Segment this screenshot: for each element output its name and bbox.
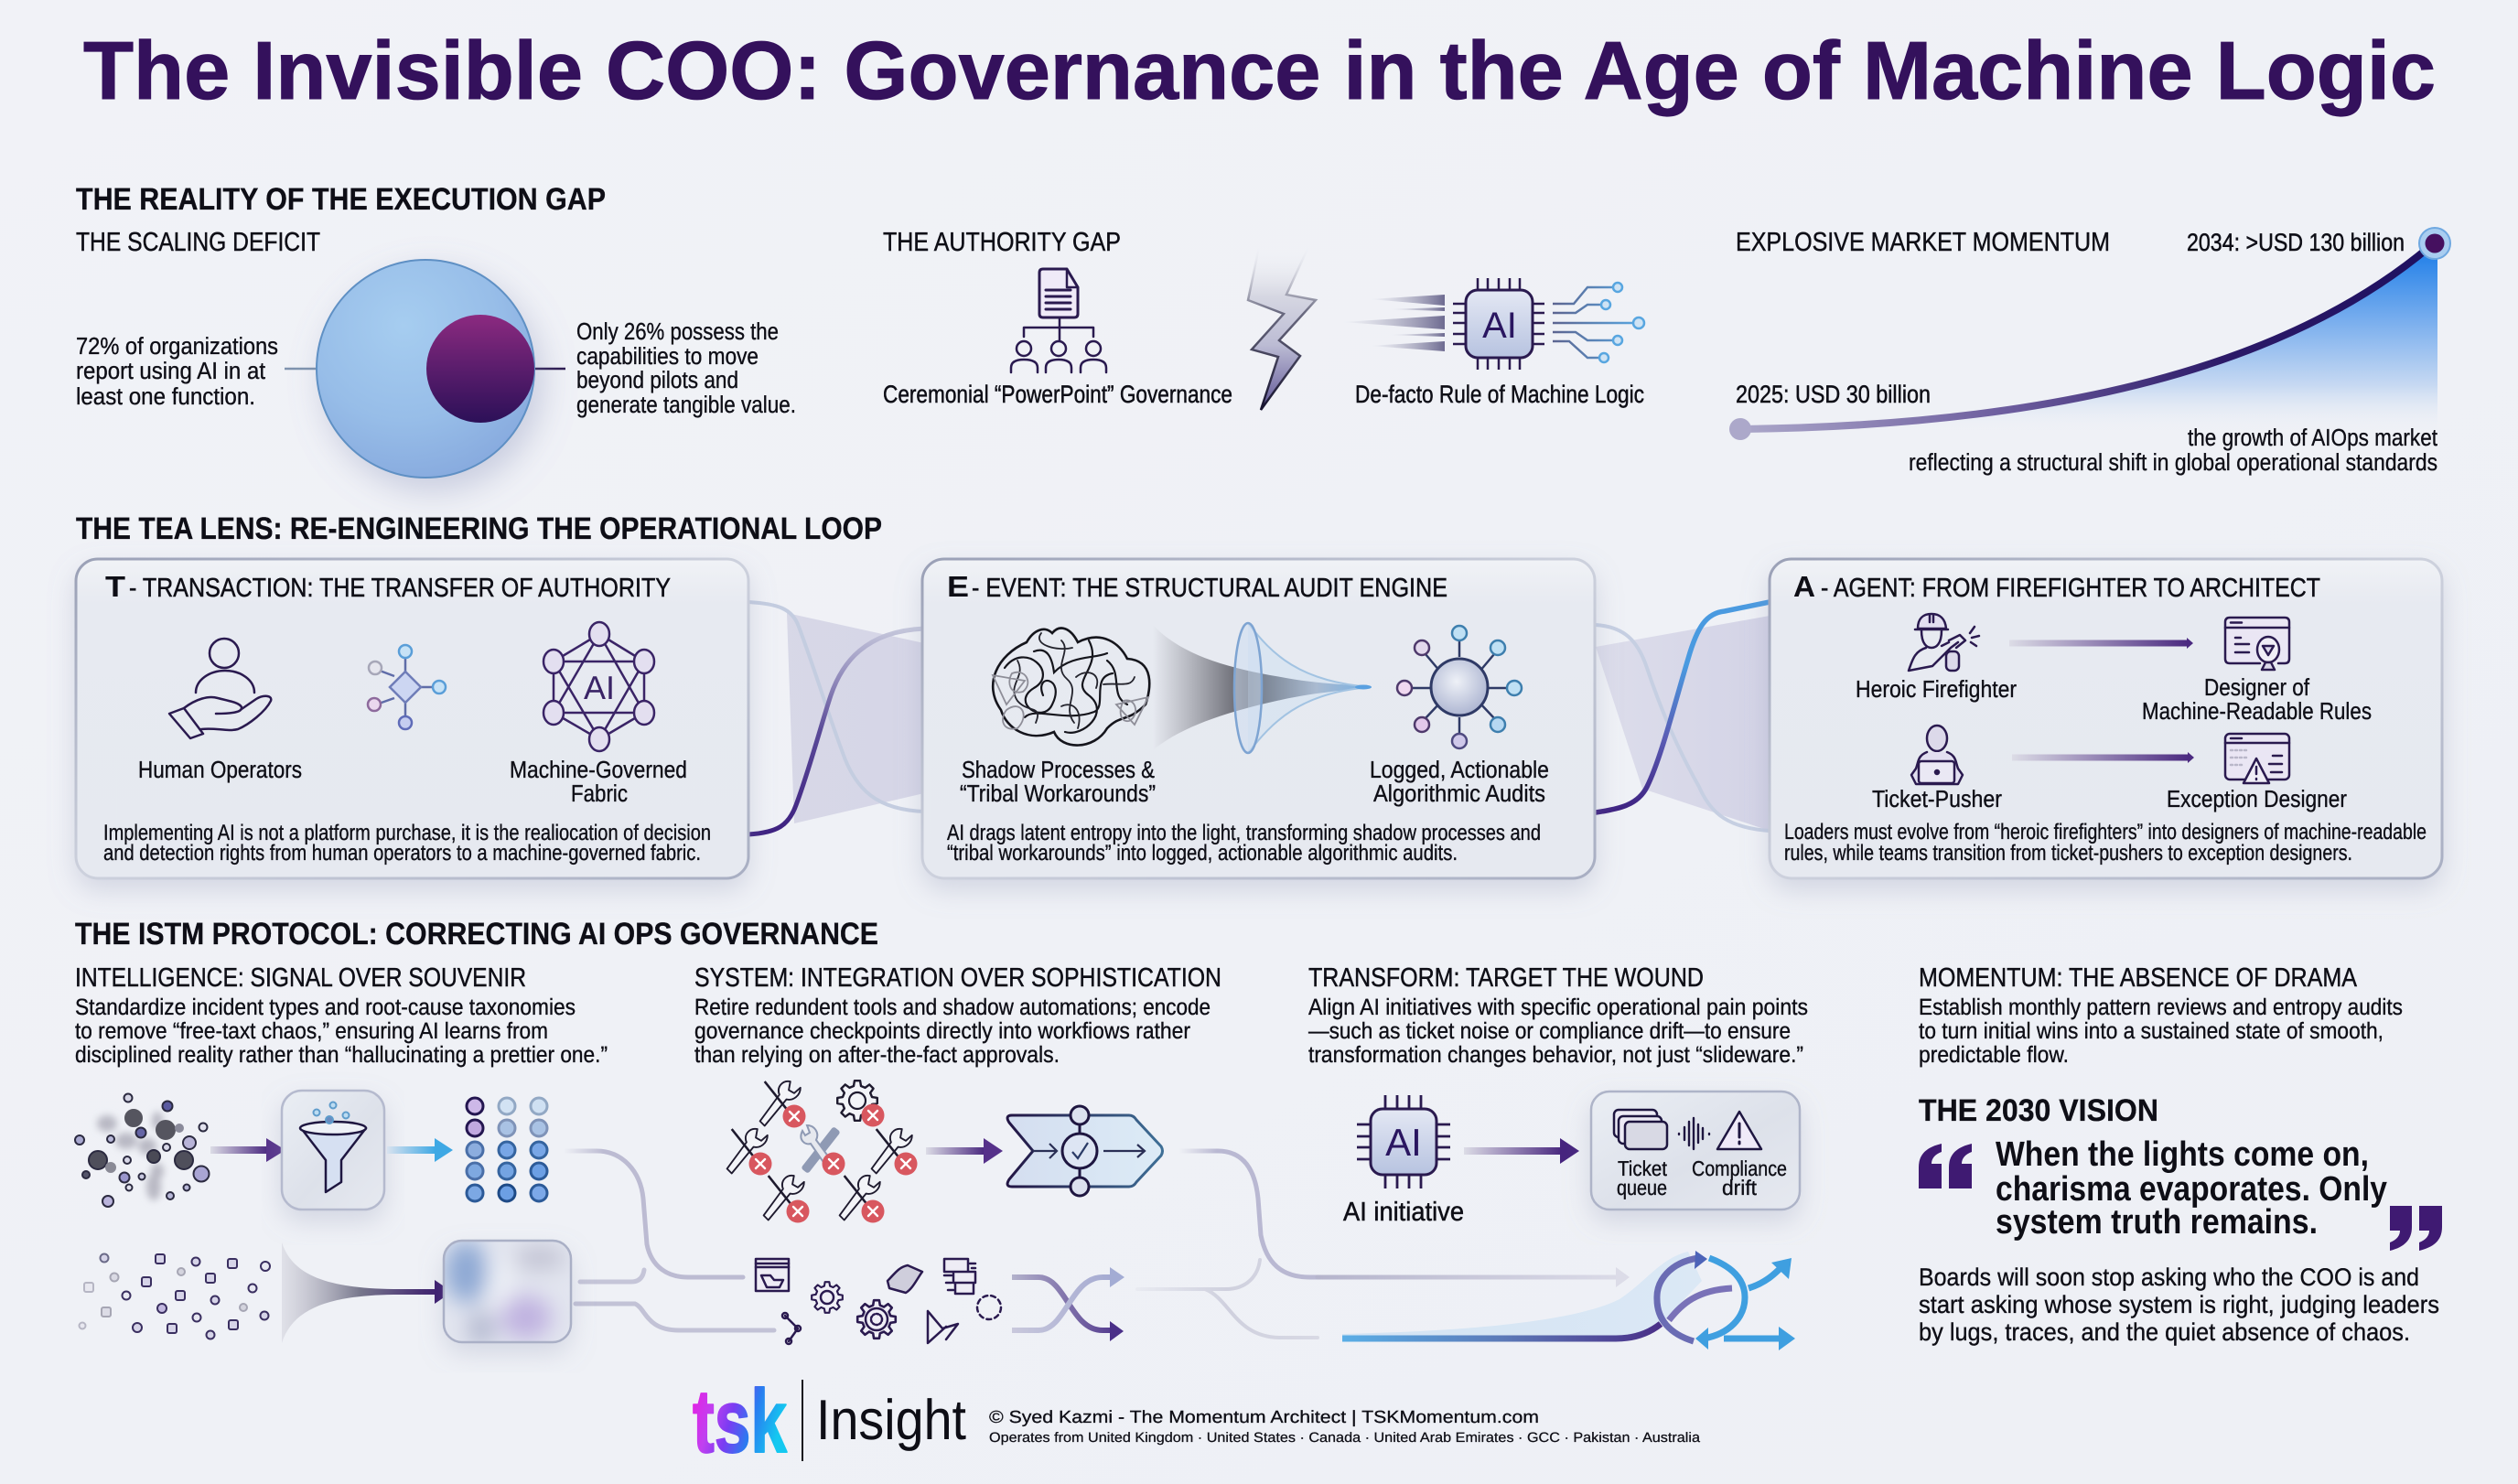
blurred hallucination card — [444, 1241, 571, 1345]
body text: event: “tribal workarounds” into logged, actionable algorithmic audits. — [947, 841, 1458, 866]
icon: document with org chart — [1011, 269, 1106, 372]
footer — [693, 1371, 1701, 1471]
connector: T to E ribbon — [748, 602, 924, 834]
quote text: When the lights come on, — [1996, 1135, 2369, 1174]
title: The Invisible COO: Governance in the Age of Machine Logic — [83, 26, 2436, 117]
illustration: transform — [1342, 1091, 1800, 1350]
body text: event: AI drags latent entropy into the light, transforming shadow processes and — [947, 821, 1541, 845]
label: designer of machine-readable rules: Designer of — [2204, 673, 2310, 701]
body: system: than relying on after-the-fact approvals. — [694, 1042, 1060, 1068]
logo: tsk Insight — [693, 1371, 966, 1471]
heading: the tea lens: THE TEA LENS: RE-ENGINEERING THE OPERATIONAL LOOP — [76, 511, 882, 546]
body text: event — [947, 821, 1541, 866]
logo: tsk Insight: tsk — [693, 1371, 787, 1471]
quote text: charisma evaporates. Only — [1996, 1170, 2387, 1209]
connector: E to A ribbon — [1596, 602, 1770, 831]
icon: AI initiative chip — [1357, 1095, 1450, 1188]
label: logged audits: Logged, Actionable — [1370, 756, 1549, 783]
body: system — [694, 995, 1211, 1068]
scattered noise particles — [75, 1094, 209, 1207]
column: momentum text — [1919, 963, 2403, 1068]
panel: the 2030 vision — [1919, 1093, 2442, 1346]
card title: transaction: T — [105, 570, 126, 603]
text: only 26 percent: Only 26% possess the — [576, 317, 779, 345]
footer credit: © Syed Kazmi - The Momentum Architect | TSKMomentum.com — [989, 1408, 1539, 1427]
body text: agent — [1784, 820, 2427, 866]
chart: growth curve — [1729, 228, 2450, 440]
card title: agent: - AGENT: FROM FIREFIGHTER TO ARCHITECT — [1821, 574, 2320, 603]
icon: audit hub — [1397, 626, 1522, 748]
caption: growth of AIOps market: reflecting a structural shift in global operational standards — [1909, 448, 2437, 476]
label: heroic firefighter: Heroic Firefighter — [1856, 675, 2017, 703]
panel: the authority gap — [883, 228, 1644, 410]
text: 72 percent of organizations: report using AI in at — [76, 357, 266, 384]
icon: transfer network — [368, 645, 446, 729]
card title: transaction: - TRANSACTION: THE TRANSFER OF AUTHORITY — [129, 574, 671, 603]
body text: agent: rules, while teams transition from ticket-pushers to exception designers. — [1784, 841, 2352, 866]
subheading: authority gap: THE AUTHORITY GAP — [883, 228, 1121, 257]
icon: closing quote marks — [2390, 1206, 2442, 1251]
body: system: governance checkpoints directly into workfiows rather — [694, 1018, 1190, 1044]
retired tools with red x badges — [727, 1081, 917, 1222]
label: 2034 value: 2034: >USD 130 billion — [2187, 229, 2405, 256]
label: compliance drift — [1692, 1156, 1787, 1199]
label: ceremonial governance: Ceremonial “PowerPoint” Governance — [883, 381, 1232, 408]
body: transform — [1308, 995, 1808, 1068]
icon: firefighter — [1909, 614, 1979, 671]
panel: E event — [922, 559, 1595, 878]
column: transform text — [1308, 963, 1808, 1068]
logo: tsk Insight: Insight — [816, 1389, 966, 1452]
body: transform: transformation changes behavior, not just “slideware.” — [1308, 1042, 1803, 1068]
icon: rule window — [2225, 618, 2289, 670]
panel: A agent — [1770, 559, 2442, 878]
label: ticket queue: queue — [1617, 1176, 1667, 1199]
column: intelligence text — [75, 963, 608, 1068]
label: AI initiative: AI initiative — [1343, 1198, 1464, 1227]
chart: nested circles — [285, 260, 565, 478]
label: shadow processes — [960, 756, 1156, 807]
icon: AI initiative chip: AI — [1385, 1121, 1422, 1164]
body: momentum: Establish monthly pattern reviews and entropy audits — [1919, 995, 2403, 1020]
label: ticket-pusher: Ticket-Pusher — [1872, 785, 2002, 812]
body: transform: Align AI initiatives with specific operational pain points — [1308, 995, 1808, 1020]
label: logged audits — [1370, 756, 1549, 807]
illustration: system tools to checkpoint — [727, 1081, 1162, 1344]
icon: ticket pusher — [1911, 726, 1963, 784]
subheading: system: SYSTEM: INTEGRATION OVER SOPHISTICATION — [694, 963, 1221, 993]
icon: exception window — [2225, 734, 2289, 783]
body: transform: —such as ticket noise or compliance drift—to ensure — [1308, 1018, 1791, 1044]
panel: the scaling deficit — [76, 228, 796, 478]
icon: workflow chevron with checkpoint — [1007, 1106, 1162, 1196]
icon: warning triangle — [1717, 1112, 1761, 1149]
quote text — [1996, 1135, 2387, 1242]
subheading: transform: TRANSFORM: TARGET THE WOUND — [1308, 963, 1704, 993]
subheading: momentum: MOMENTUM: THE ABSENCE OF DRAMA — [1919, 963, 2358, 993]
quote text: system truth remains. — [1996, 1203, 2318, 1242]
panel: explosive market momentum — [1729, 228, 2450, 476]
subheading: scaling deficit: THE SCALING DEFICIT — [76, 228, 320, 257]
icon: opening quote marks — [1919, 1144, 1972, 1188]
body text: transaction: Implementing AI is not a platform purchase, it is the realiocation of decision — [103, 821, 711, 845]
ordered dot grid — [467, 1098, 547, 1201]
label: designer of machine-readable rules — [2142, 673, 2372, 725]
body: intelligence: disciplined reality rather than “hallucinating a prettier one.” — [75, 1042, 608, 1068]
body: boards: start asking whose system is right, judging leaders — [1919, 1291, 2439, 1318]
body: boards — [1919, 1264, 2439, 1346]
icon: momentum ramp and loop — [1342, 1251, 1795, 1350]
body text: transaction — [103, 821, 711, 866]
body: system: Retire redundent tools and shadow automations; encode — [694, 995, 1211, 1020]
card title: event: E — [947, 570, 969, 603]
panel: T transaction — [76, 559, 748, 878]
caption: growth of AIOps market — [1909, 424, 2438, 476]
text: 72 percent of organizations: 72% of organizations — [76, 332, 278, 360]
icon: human operators hand — [169, 639, 271, 738]
arrow: AI to pain points — [1464, 1138, 1579, 1164]
arrow: into filter — [210, 1138, 285, 1162]
body: intelligence: Standardize incident types and root-cause taxonomies — [75, 995, 576, 1020]
body text: transaction: and detection rights from human operators to a machine-governed fabric. — [103, 841, 701, 866]
card title: event: - EVENT: THE STRUCTURAL AUDIT ENGINE — [972, 574, 1447, 603]
text: 72 percent of organizations: least one function. — [76, 382, 255, 410]
body: momentum: predictable flow. — [1919, 1042, 2069, 1068]
label: compliance drift: drift — [1722, 1176, 1758, 1199]
label: exception designer: Exception Designer — [2167, 785, 2347, 812]
arrow: to workflow — [926, 1138, 1003, 1164]
icon: noise waveform — [1679, 1118, 1709, 1149]
body: intelligence: to remove “free-taxt chaos,” ensuring AI learns from — [75, 1018, 548, 1044]
heading: 2030 vision: THE 2030 VISION — [1919, 1093, 2158, 1128]
icon: funnel in glass card — [282, 1091, 384, 1210]
icon: AI chip with speed streaks and circuits: AI — [1482, 306, 1517, 346]
footer locations: Operates from United Kingdom · United States · Canada · United Arab Emirates · GCC · Pakistan · Australia — [989, 1430, 1701, 1446]
label: shadow processes: “Tribal Workarounds” — [960, 780, 1156, 807]
label: 2025 value: 2025: USD 30 billion — [1736, 381, 1931, 408]
label: logged audits: Algorithmic Audits — [1373, 780, 1545, 807]
icon: funnel lens and beam — [1153, 623, 1372, 753]
text: 72 percent of organizations — [76, 332, 278, 410]
icon: machine governed fabric: AI — [584, 669, 615, 706]
text: only 26 percent: capabilities to move — [576, 342, 759, 370]
label: ticket queue — [1617, 1156, 1668, 1199]
text: only 26 percent: generate tangible value. — [576, 391, 796, 418]
subheading: intelligence: INTELLIGENCE: SIGNAL OVER SOUVENIR — [75, 963, 526, 993]
card background — [76, 559, 748, 878]
body: momentum — [1919, 995, 2403, 1068]
card background — [922, 559, 1595, 878]
illustration: intelligence signal filter — [75, 1091, 571, 1345]
arrow: ticket pusher to exception designer — [2012, 752, 2194, 763]
column: system text — [694, 963, 1221, 1068]
flow lines: connecting pipes — [564, 1151, 1630, 1338]
body: boards: by lugs, traces, and the quiet absence of chaos. — [1919, 1318, 2410, 1346]
icon: machine governed fabric — [543, 622, 654, 751]
label: de-facto rule: De-facto Rule of Machine Logic — [1355, 381, 1644, 408]
label: machine-governed fabric — [510, 756, 687, 807]
text: only 26 percent: beyond pilots and — [576, 366, 738, 393]
heading: the ISTM protocol: THE ISTM PROTOCOL: CORRECTING AI OPS GOVERNANCE — [75, 917, 878, 952]
icon: tangled shadow processes — [993, 629, 1149, 746]
label: ticket queue: Ticket — [1618, 1156, 1668, 1180]
label: machine-governed fabric: Machine-Governed — [510, 756, 687, 783]
card title: agent: A — [1793, 570, 1815, 603]
lower scattered particles — [79, 1253, 270, 1339]
icon: lightning bolt — [1248, 247, 1316, 410]
label: machine-governed fabric: Fabric — [571, 780, 628, 807]
label: human operators: Human Operators — [138, 756, 302, 783]
label: shadow processes: Shadow Processes & — [962, 756, 1155, 783]
icon: AI chip with speed streaks and circuits — [1342, 278, 1644, 370]
label: designer of machine-readable rules: Machine-Readable Rules — [2142, 697, 2372, 725]
heading: the reality of the execution gap: THE REALITY OF THE EXECUTION GAP — [76, 182, 606, 217]
subheading: market momentum: EXPLOSIVE MARKET MOMENTUM — [1736, 228, 2110, 257]
card background — [1770, 559, 2442, 878]
body: boards: Boards will soon stop asking who the COO is and — [1919, 1264, 2419, 1291]
body: momentum: to turn initial wins into a sustained state of smooth, — [1919, 1018, 2383, 1044]
body: intelligence — [75, 995, 608, 1068]
small integration icons — [756, 1259, 1001, 1344]
arrow: firefighter to designer — [2009, 638, 2193, 649]
arrows: shuffled paths — [1012, 1267, 1124, 1341]
arrow: out of filter — [387, 1138, 453, 1162]
icon: ticket stack — [1614, 1110, 1667, 1149]
glass card: ticket queue and compliance drift — [1591, 1091, 1800, 1210]
caption: growth of AIOps market: the growth of AIOps market — [2188, 424, 2438, 451]
text: only 26 percent — [576, 317, 796, 418]
label: compliance drift: Compliance — [1692, 1156, 1787, 1180]
arrow: flare into blurred box — [282, 1242, 452, 1343]
